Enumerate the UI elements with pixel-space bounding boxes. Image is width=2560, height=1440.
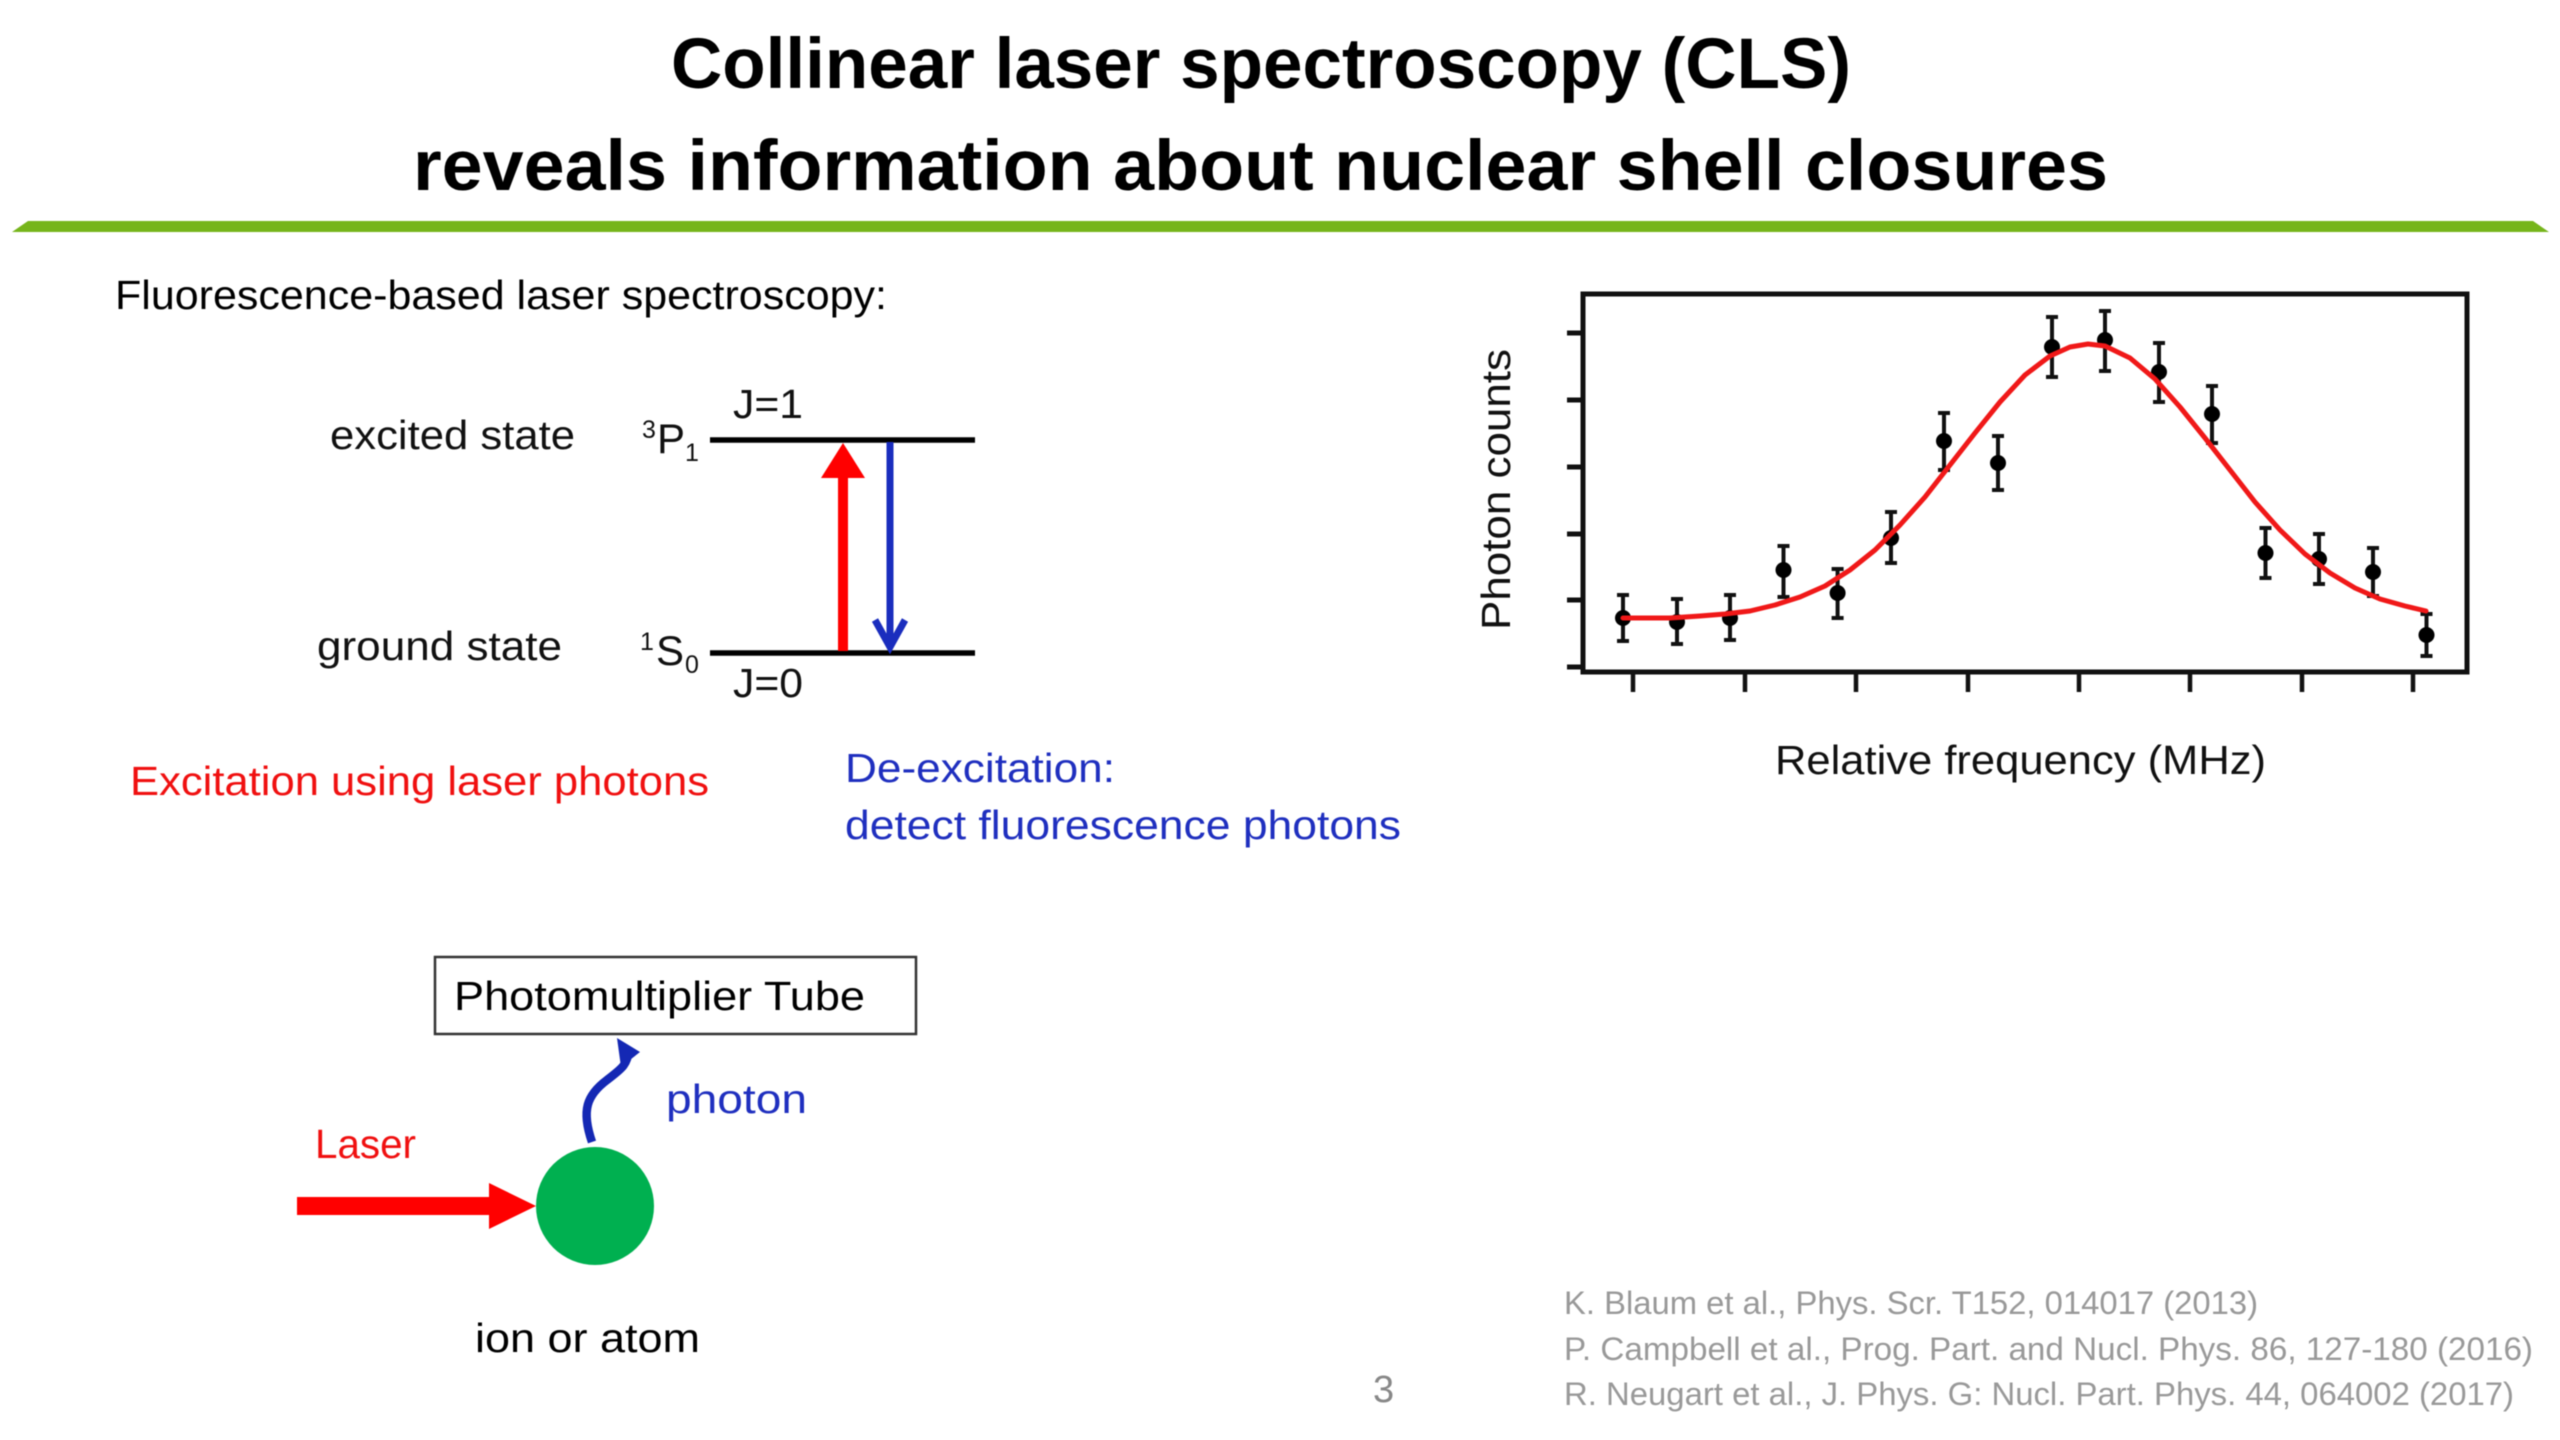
excited level line [710,437,975,443]
term symbol 1S0: S [656,627,684,674]
green title divider [12,221,2549,232]
laser arrow [297,1183,536,1229]
term symbol 1S0 [640,627,699,679]
energy level diagram [317,381,975,706]
term symbol 3P1 [642,415,699,467]
fit curve [1623,344,2426,618]
term symbol 1S0: 0 [685,651,699,679]
page number: 3 [1373,1369,1394,1411]
x axis label: Relative frequency (MHz) [1775,737,2266,783]
photomultiplier tube box [435,957,916,1034]
references: K. Blaum et al., Phys. Scr. T152, 014017 (2013) [1564,1285,2258,1321]
heading: fluorescence-based laser spectroscopy: Fluorescence-based laser spectroscopy: [115,272,887,318]
term symbol 1S0: 1 [640,628,654,656]
label: photon: photon [666,1076,807,1122]
term symbol 3P1: P [657,415,685,462]
photon wavy arrow [587,1038,640,1142]
references [1564,1285,2533,1412]
arrow: de-excitation [875,442,905,647]
references: P. Campbell et al., Prog. Part. and Nucl. Phys. 86, 127-180 (2016) [1564,1331,2533,1367]
x axis ticks [1633,672,2413,692]
plot frame [1583,294,2467,672]
y axis ticks [1567,333,1583,667]
ion or atom sphere [536,1147,654,1265]
data points with error bars [1615,311,2434,656]
de-excitation caption [845,745,1401,848]
label: ion or atom: ion or atom [475,1315,700,1361]
label: J=0: J=0 [733,660,803,706]
de-excitation caption: detect fluorescence photons [845,802,1401,848]
title: reveals information about nuclear shell closures [413,127,2108,206]
title [413,25,2108,206]
term symbol 3P1: 1 [685,439,699,467]
title: Collinear laser spectroscopy (CLS) [671,25,1851,104]
label: J=1: J=1 [733,381,803,427]
apparatus schematic [297,957,916,1361]
references: R. Neugart et al., J. Phys. G: Nucl. Part. Phys. 44, 064002 (2017) [1564,1376,2514,1412]
label: Laser: Laser [315,1121,416,1167]
arrow: excitation [821,443,865,651]
ground level line [710,650,975,656]
photomultiplier tube box: Photomultiplier Tube [454,973,865,1019]
y axis label: Photon counts [1473,349,1519,630]
label: ground state: ground state [317,623,562,669]
label: excited state: excited state [330,412,575,458]
resonance spectrum chart [1473,294,2467,783]
excitation caption: Excitation using laser photons [130,758,709,804]
term symbol 3P1: 3 [642,416,656,444]
de-excitation caption: De-excitation: [845,745,1115,791]
